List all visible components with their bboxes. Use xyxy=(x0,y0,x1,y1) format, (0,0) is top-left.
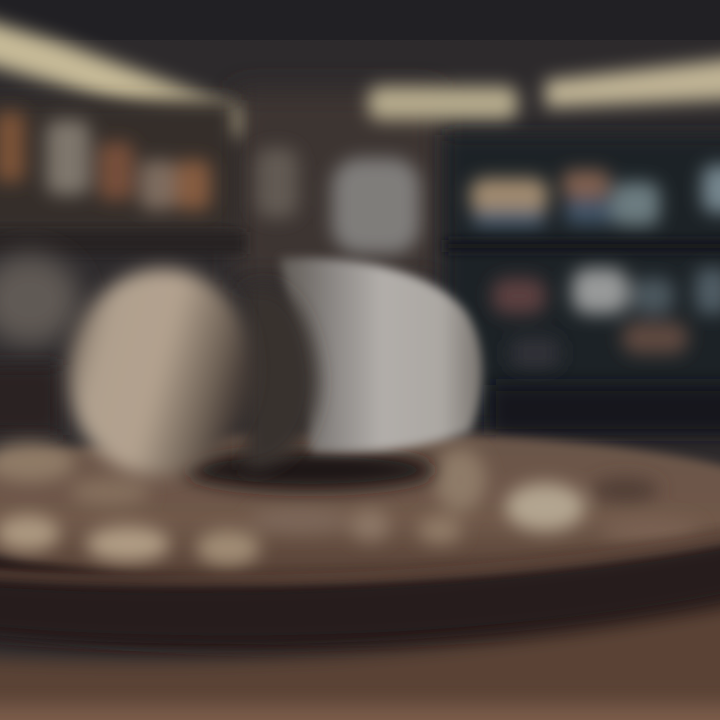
tray rim xyxy=(0,530,720,644)
table surface xyxy=(0,595,720,720)
right display cabinet xyxy=(445,135,720,435)
egg-shaped coin xyxy=(54,256,266,488)
metal cylinder xyxy=(245,258,482,470)
shadow under objects xyxy=(185,450,435,490)
ceiling lights xyxy=(0,12,720,138)
left shelves xyxy=(0,100,245,435)
coins on tray xyxy=(0,442,700,566)
center jars xyxy=(256,148,420,254)
tray xyxy=(0,432,720,652)
